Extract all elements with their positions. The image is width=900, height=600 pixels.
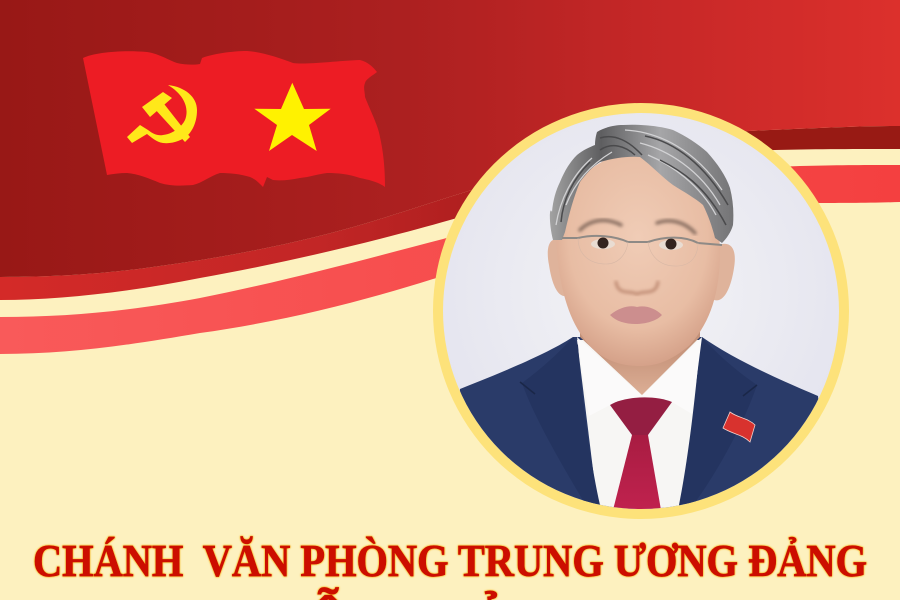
lapels (522, 337, 757, 512)
icon: hammer and sickle (127, 85, 197, 143)
suit (460, 337, 818, 509)
icon: yellow star (254, 83, 331, 151)
lapel pin (723, 412, 755, 442)
title (33, 535, 867, 600)
eyebrows (580, 220, 695, 233)
portrait backdrop (433, 102, 849, 520)
shirt (577, 340, 702, 510)
wave: mid red band (0, 126, 900, 300)
lapel notches (520, 382, 757, 396)
collar (577, 337, 702, 383)
eyes (591, 238, 683, 250)
hair (550, 125, 733, 243)
portrait ring (433, 103, 849, 519)
tie (610, 397, 672, 510)
mouth (610, 306, 662, 324)
wave: light red band (0, 165, 900, 354)
icon: party flag (83, 51, 385, 187)
neck (580, 332, 700, 395)
portrait (443, 113, 839, 509)
glasses (562, 236, 722, 266)
nose (616, 282, 658, 294)
wave: top red header (0, 0, 900, 277)
face (556, 152, 720, 366)
ears (548, 239, 735, 300)
